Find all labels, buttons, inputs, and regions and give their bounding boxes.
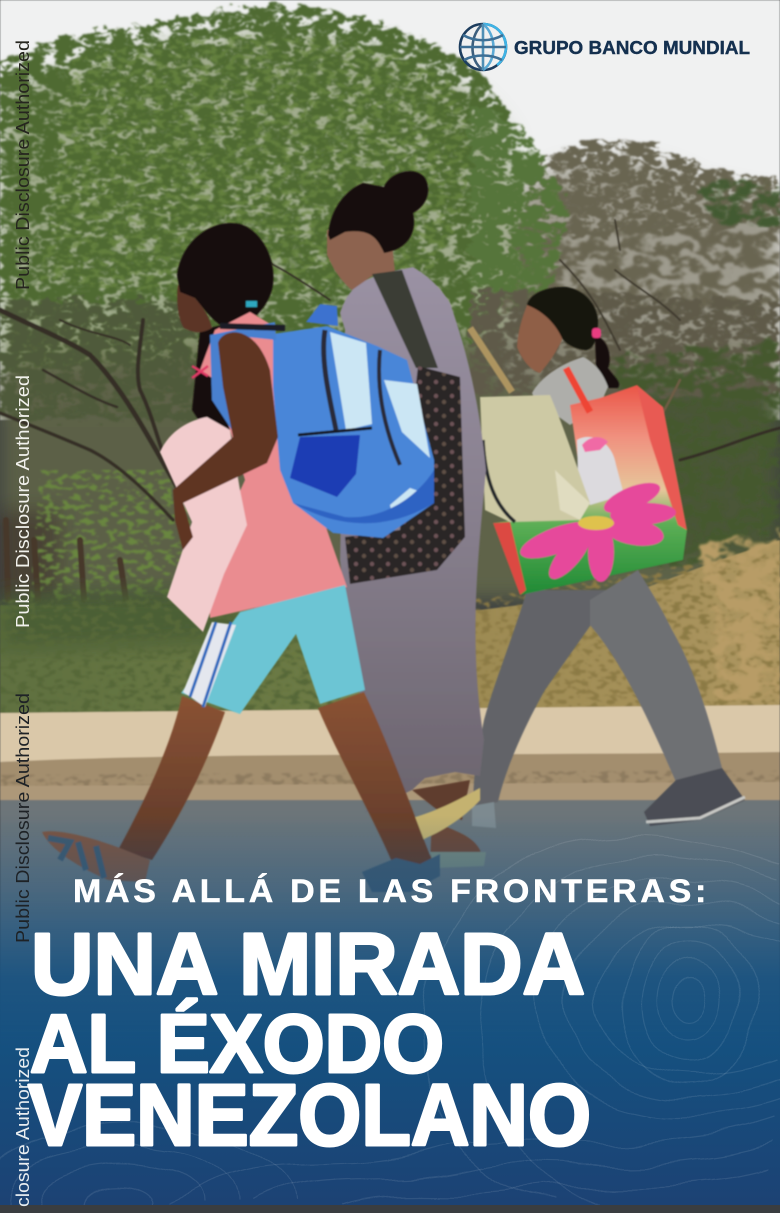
hair <box>527 287 598 350</box>
flower centre <box>578 516 614 530</box>
left shoulder strap <box>210 322 276 450</box>
subtitle: MÁS ALLÁ DE LAS FRONTERAS: <box>73 873 710 909</box>
head <box>327 225 395 290</box>
light panels <box>330 332 372 430</box>
kitty figure <box>577 437 624 505</box>
right tree base tone <box>500 161 780 380</box>
pink top <box>200 312 347 618</box>
zips and seams <box>324 330 336 430</box>
side stamp 2: Public Disclosure Authorized <box>13 375 33 628</box>
left lower foliage <box>0 300 200 420</box>
pink ribbon <box>592 328 601 338</box>
girl at left <box>42 223 440 892</box>
bag strap <box>566 368 590 412</box>
hair tie <box>246 301 257 307</box>
back leg <box>118 696 225 860</box>
side stamp 3: Public Disclosure Authorized <box>13 693 33 943</box>
shoe back <box>472 802 496 828</box>
canopy base tone <box>0 30 520 360</box>
dark pocket <box>290 435 360 497</box>
beige bag <box>480 395 590 522</box>
grass dark upper band <box>0 590 300 650</box>
hair <box>177 223 273 330</box>
right lower foliage <box>600 340 780 570</box>
front foot and gold sandal <box>412 780 470 820</box>
tote bag strap <box>372 270 438 368</box>
shorts <box>181 585 365 714</box>
shirt <box>532 357 608 425</box>
hair <box>328 171 428 253</box>
face <box>177 285 212 332</box>
title <box>28 916 591 1164</box>
shorts stripes <box>183 622 236 707</box>
branches <box>0 220 780 600</box>
tree canopy right upper <box>520 141 780 240</box>
woman at right <box>470 287 745 828</box>
ponytail <box>595 335 619 388</box>
title: VENEZOLANO <box>28 1067 591 1164</box>
woman in centre <box>327 171 486 868</box>
bottom dark strip <box>0 1205 780 1213</box>
jeans back leg <box>473 590 610 806</box>
green crown on right tree <box>470 105 570 330</box>
arm <box>173 332 278 550</box>
contour line pattern <box>0 836 780 1203</box>
shoe front <box>644 768 745 826</box>
dark band of right tree <box>700 180 780 225</box>
sky <box>0 0 780 420</box>
wooden stick <box>470 328 512 392</box>
photo: three walking people <box>42 171 745 892</box>
backpack <box>210 304 434 538</box>
logo wordmark: GRUPO BANCO MUNDIAL <box>514 37 750 58</box>
pink ribbon <box>192 366 208 378</box>
front leg <box>318 692 436 872</box>
flower petals <box>516 477 677 585</box>
back hair <box>192 320 245 430</box>
distant vegetation <box>0 30 780 600</box>
handle <box>306 304 338 326</box>
pink cloth <box>160 417 247 632</box>
side stamp 4: closure Authorized <box>13 1047 33 1207</box>
grass band <box>0 540 780 716</box>
curb <box>0 752 780 790</box>
tote bag <box>345 366 465 584</box>
face <box>517 305 562 373</box>
bag red edge <box>637 387 687 530</box>
sidewalk <box>0 705 780 762</box>
title: UNA MIRADA <box>31 916 585 1013</box>
front sandal <box>362 854 440 892</box>
grass texture <box>0 600 340 716</box>
tree canopy left <box>0 5 520 370</box>
bag body <box>493 385 687 595</box>
backpack body <box>273 326 434 538</box>
tree canopy highlights <box>40 35 469 300</box>
title: AL ÉXODO <box>30 997 444 1090</box>
gravel edge <box>0 782 780 804</box>
back foot <box>430 815 484 866</box>
tree canopy right lower <box>500 225 780 310</box>
back sandal and foot <box>42 831 150 882</box>
jeans front leg <box>590 570 722 782</box>
logo: Grupo Banco Mundial <box>460 24 750 70</box>
dress <box>340 267 486 812</box>
blue gradient panel <box>0 815 780 1205</box>
road <box>0 800 780 1060</box>
flowered shopping bag <box>493 368 687 595</box>
icon: globe <box>460 24 506 70</box>
side stamp 1: Public Disclosure Authorized <box>13 40 33 290</box>
